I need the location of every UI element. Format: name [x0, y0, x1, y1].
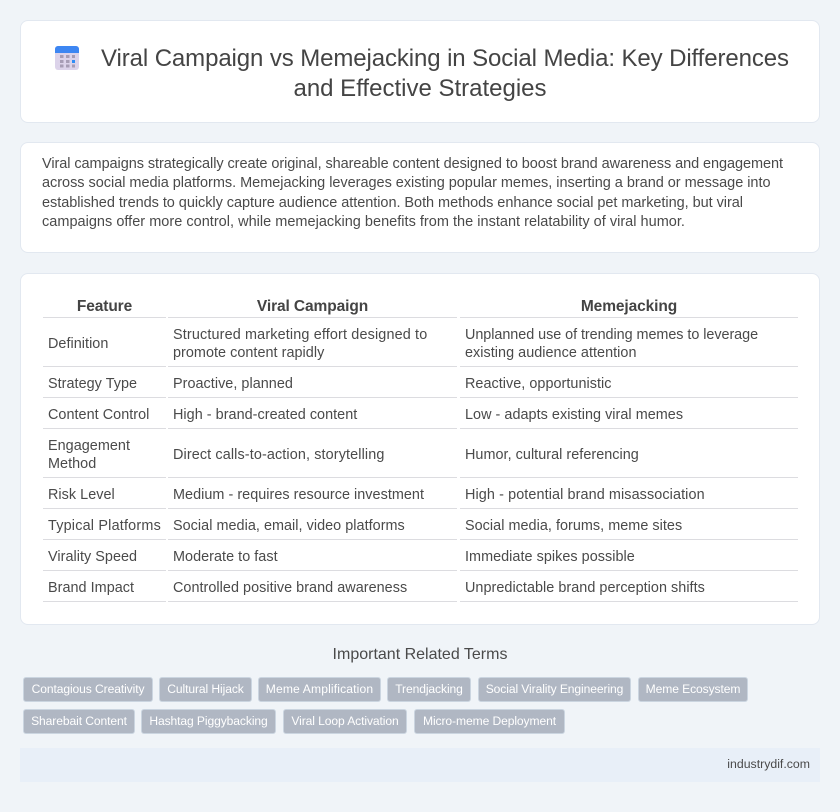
comparison table: Immediate spikes possible: [465, 549, 635, 565]
comparison table: Memejacking: [581, 298, 677, 315]
related terms tags: Cultural Hijack: [167, 682, 244, 696]
comparison table: Feature: [77, 298, 132, 315]
footer source text: industrydif.com: [727, 757, 810, 771]
intro paragraph: established trends to quickly capture audience attention. Both methods enhance social pet marketing, but viral: [42, 195, 743, 211]
comparison table: Content Control: [48, 407, 149, 423]
comparison table: Reactive, opportunistic: [465, 376, 612, 392]
related terms tags: [23, 677, 748, 734]
comparison table: High - potential brand misassociation: [465, 487, 705, 503]
intro text panel: [20, 142, 820, 253]
comparison table: Viral Campaign: [257, 298, 368, 315]
comparison table: Typical Platforms: [48, 518, 161, 534]
comparison table: High - brand-created content: [173, 407, 357, 423]
related terms tags: Hashtag Piggybacking: [149, 714, 268, 728]
intro paragraph: campaigns offer more control, while memejacking benefits from the instant relatability of viral humor.: [42, 214, 685, 230]
related terms tags: Meme Amplification: [266, 682, 373, 696]
related terms heading: Important Related Terms: [333, 646, 507, 663]
related terms tags: Trendjacking: [395, 682, 463, 696]
comparison table: Strategy Type: [48, 376, 137, 392]
related terms tags: Sharebait Content: [31, 714, 127, 728]
comparison table panel: [20, 273, 820, 625]
comparison table: Method: [48, 456, 96, 472]
comparison table: existing audience attention: [465, 345, 636, 361]
icon: calendar: [55, 46, 79, 70]
related terms tags: Social Virality Engineering: [486, 682, 623, 696]
title: [101, 45, 789, 102]
comparison table: Structured marketing effort designed to: [173, 327, 427, 343]
header panel: [20, 20, 820, 123]
comparison table: Brand Impact: [48, 580, 134, 596]
comparison table: promote content rapidly: [173, 345, 324, 361]
comparison table: Moderate to fast: [173, 549, 278, 565]
comparison table: Social media, forums, meme sites: [465, 518, 682, 534]
related terms tags: Viral Loop Activation: [291, 714, 399, 728]
related terms tags: Micro-meme Deployment: [423, 714, 556, 728]
comparison table: Unpredictable brand perception shifts: [465, 580, 705, 596]
title: and Effective Strategies: [293, 75, 547, 102]
related terms tags: Meme Ecosystem: [646, 682, 740, 696]
comparison table: Medium - requires resource investment: [173, 487, 424, 503]
comparison table: [43, 298, 798, 602]
title: Viral Campaign vs Memejacking in Social Media: Key Differences: [101, 45, 789, 72]
comparison table: Risk Level: [48, 487, 115, 503]
comparison table: Definition: [48, 336, 108, 352]
comparison table: Unplanned use of trending memes to leverage: [465, 327, 758, 343]
comparison table: Direct calls-to-action, storytelling: [173, 447, 384, 463]
related terms tags: Contagious Creativity: [32, 682, 144, 696]
comparison table: Engagement: [48, 438, 130, 454]
comparison table: Low - adapts existing viral memes: [465, 407, 683, 423]
comparison table: Virality Speed: [48, 549, 137, 565]
intro paragraph: across social media platforms. Memejacking leverages existing popular memes, inserting a brand or message into: [42, 175, 770, 191]
comparison table: Social media, email, video platforms: [173, 518, 405, 534]
intro paragraph: Viral campaigns strategically create original, shareable content designed to boost brand awareness and engagement: [42, 156, 783, 172]
comparison table: Humor, cultural referencing: [465, 447, 639, 463]
footer bar: [20, 748, 820, 782]
comparison table: Controlled positive brand awareness: [173, 580, 407, 596]
intro paragraph: [42, 156, 783, 230]
comparison table: Proactive, planned: [173, 376, 293, 392]
